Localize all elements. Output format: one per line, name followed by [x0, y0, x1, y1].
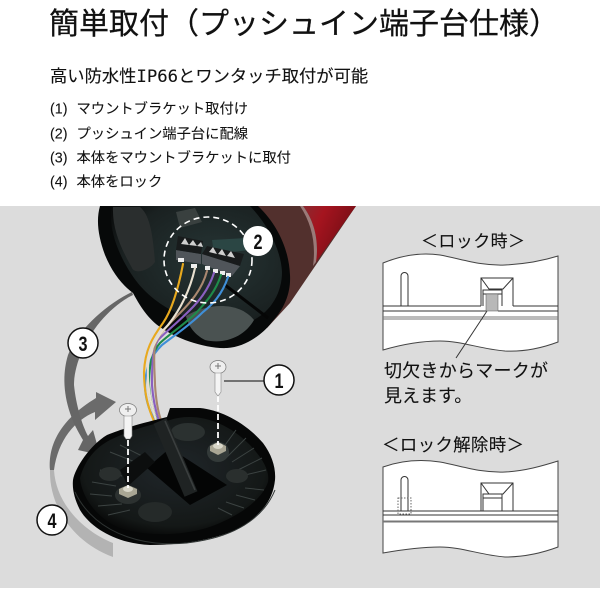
nuts	[115, 442, 229, 504]
mounting bracket	[73, 408, 275, 545]
diagram: unlocked state	[383, 461, 558, 557]
steps list: (1)	[50, 102, 67, 118]
dashed circle callout	[164, 217, 252, 303]
steps list: 本体をロック	[76, 174, 162, 190]
diagram: locked state	[383, 254, 558, 358]
steps list	[50, 100, 291, 190]
callout 4	[37, 505, 67, 535]
callout 3	[68, 328, 98, 358]
subtitle: 高い防水性IP66とワンタッチ取付が可能	[50, 66, 368, 87]
screw 1	[210, 360, 226, 445]
title: 簡単取付（プッシュイン端子台仕様）	[49, 8, 559, 41]
note text	[384, 361, 548, 406]
arrow 3	[64, 292, 133, 455]
callout 1: 1	[274, 370, 284, 393]
arrow 4	[50, 392, 116, 557]
note text: 見えます。	[384, 386, 472, 406]
leader line for callout 1	[224, 380, 266, 382]
callout 2: 2	[254, 231, 262, 254]
callout 1	[264, 365, 294, 395]
terminal blocks	[176, 236, 244, 277]
callout 4: 4	[48, 510, 57, 533]
illustration: lamp body	[98, 206, 356, 348]
callout 2	[243, 226, 273, 256]
steps list: マウントブラケット取付け	[76, 100, 248, 118]
steps list: (4)	[50, 174, 67, 190]
heading: unlocked state: ＜ロック解除時＞	[382, 435, 524, 455]
steps list: プッシュイン端子台に配線	[76, 126, 248, 142]
wires	[144, 264, 228, 421]
screw 2	[120, 404, 136, 488]
steps list: (3)	[50, 150, 67, 166]
steps list: 本体をマウントブラケットに取付	[76, 148, 291, 166]
note text: 切欠きからマークが	[384, 361, 548, 381]
panel: grey background	[0, 206, 600, 588]
heading: locked state: ＜ロック時＞	[421, 232, 525, 251]
steps list: (2)	[50, 126, 67, 142]
callout 3: 3	[78, 333, 88, 356]
